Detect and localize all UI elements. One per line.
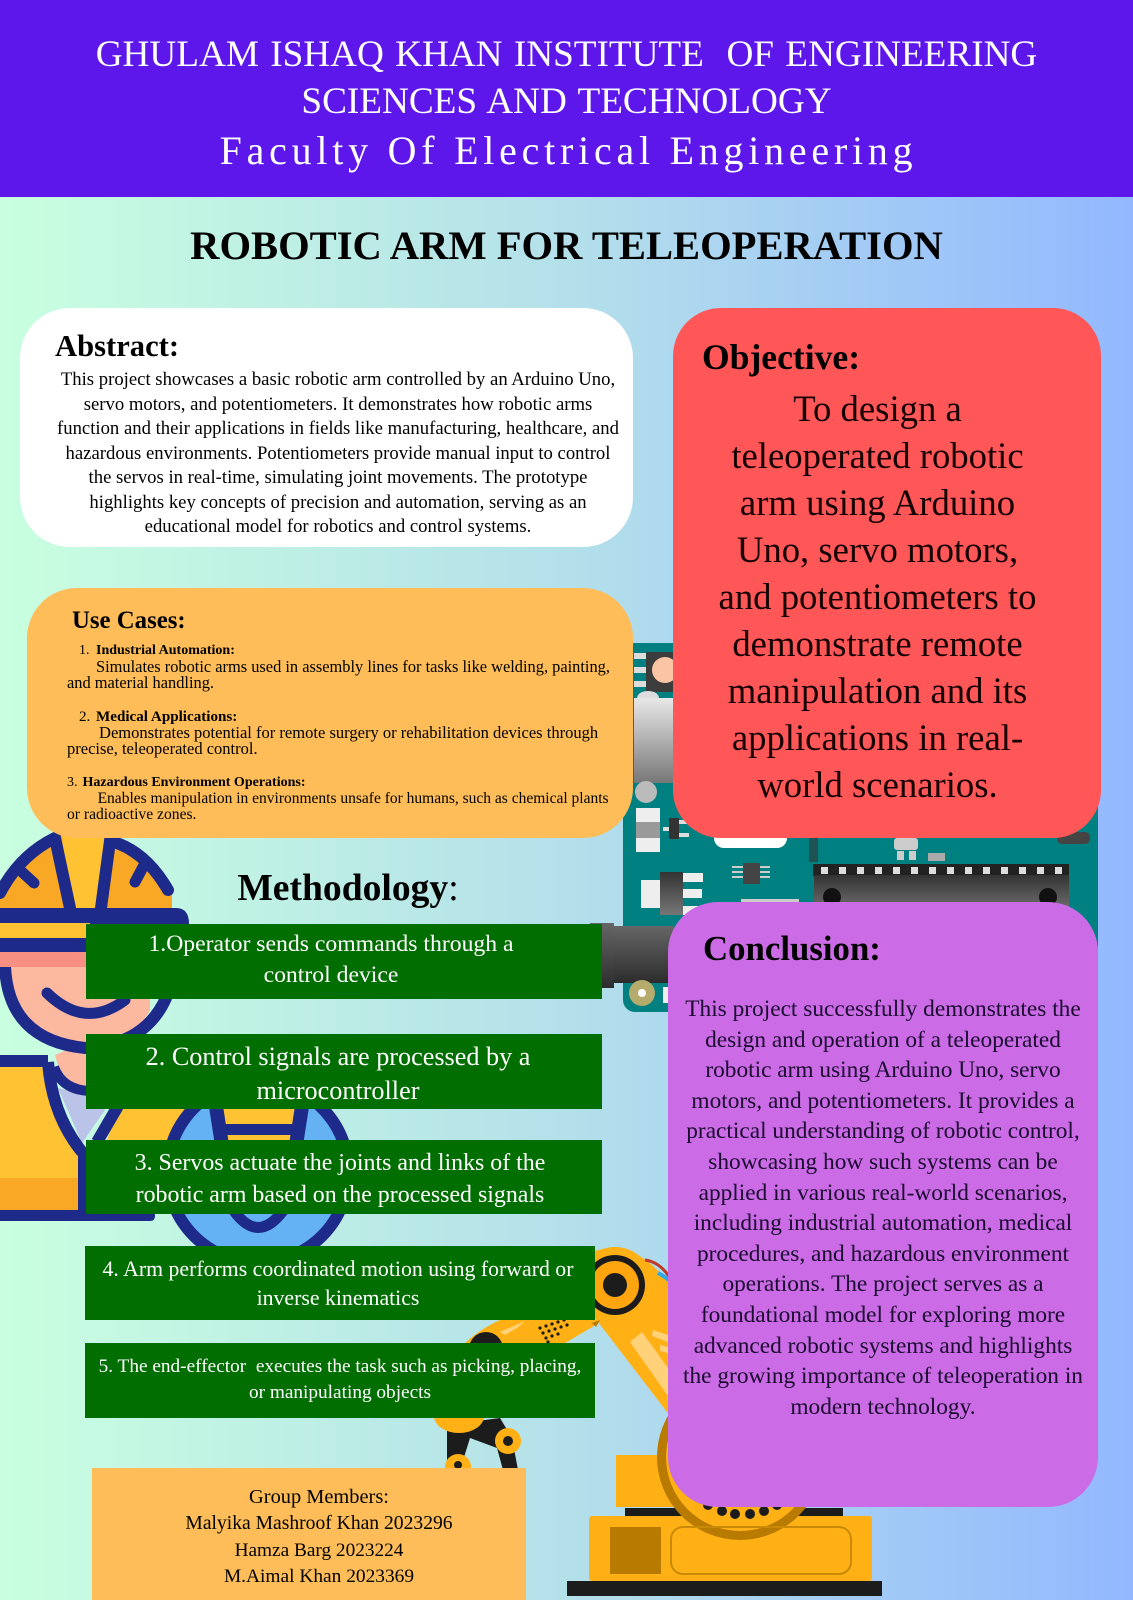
abstract text: servo motors, and potentiometers. It demonstrates how robotic arms [84, 394, 592, 414]
conclusion text: motors, and potentiometers. It provides a [691, 1088, 1075, 1114]
step 1 [86, 924, 602, 999]
use cases list: Medical Applications: [96, 709, 237, 725]
conclusion text: design and operation of a teleoperated [705, 1027, 1061, 1053]
use cases list: 1. [79, 643, 90, 658]
use cases list: and material handling. [67, 673, 214, 692]
conclusion heading: Conclusion: [703, 929, 881, 968]
abstract text: educational model for robotics and control systems. [145, 516, 531, 537]
institute name: GHULAM ISHAQ KHAN INSTITUTE OF ENGINEERING SCIENCES AND TECHNOLOGY [96, 34, 1037, 122]
use cases list: Enables manipulation in environments unsafe for humans, such as chemical plants [98, 790, 609, 806]
abstract text: highlights key concepts of precision and automation, serving as an [89, 492, 587, 512]
abstract heading: Abstract: [55, 329, 179, 363]
conclusion text: practical understanding of robotic control, [686, 1118, 1080, 1144]
conclusion text: showcasing how such systems can be [708, 1149, 1058, 1175]
title: ROBOTIC ARM FOR TELEOPERATION [190, 223, 943, 268]
step 1: control device [264, 962, 398, 988]
objective text: applications in real- [732, 717, 1023, 758]
panel: use cases [27, 588, 633, 838]
use cases list [67, 643, 610, 823]
conclusion text [683, 996, 1083, 1420]
conclusion text: advanced robotic systems and highlights [694, 1333, 1072, 1359]
objective text: arm using Arduino [740, 482, 1015, 523]
use cases list: or radioactive zones. [67, 806, 196, 823]
step 3: 3. Servos actuate the joints and links of the [135, 1150, 545, 1176]
conclusion text: This project successfully demonstrates the [685, 996, 1081, 1022]
use cases list: 2. [79, 709, 90, 725]
step 2: microcontroller [257, 1076, 419, 1105]
step 5 [85, 1343, 595, 1418]
step 3: robotic arm based on the processed signals [136, 1182, 544, 1208]
step 4: inverse kinematics [257, 1286, 419, 1310]
use cases list: Industrial Automation: [96, 643, 235, 658]
conclusion text: operations. The project serves as a [722, 1271, 1044, 1297]
step 4 [85, 1246, 595, 1320]
conclusion text: the growing importance of teleoperation in [683, 1363, 1083, 1389]
objective heading: Objective: [702, 337, 860, 377]
conclusion text: robotic arm using Arduino Uno, servo [705, 1057, 1061, 1083]
step 4: 4. Arm performs coordinated motion using forward or [103, 1257, 573, 1281]
panel: group members [92, 1468, 526, 1600]
step 5: 5. The end-effector executes the task such as picking, placing, or manipulating objects [99, 1356, 581, 1403]
use cases heading: Use Cases: [72, 607, 186, 634]
use cases list: precise, teleoperated control. [67, 739, 258, 758]
objective text: world scenarios. [757, 764, 998, 805]
use cases list: Simulates robotic arms used in assembly lines for tasks like welding, painting, [96, 656, 610, 676]
use cases list: 3. [67, 775, 78, 790]
panel: objective [673, 308, 1101, 838]
illustration: worker with hard hat [0, 832, 349, 1246]
objective text: To design a [793, 388, 962, 429]
step 1: 1.Operator sends commands through a [148, 930, 514, 956]
panel: group members: M.Aimal Khan 2023369 [224, 1566, 414, 1587]
methodology heading: Methodology: [237, 868, 459, 909]
use cases list: Demonstrates potential for remote surgery or rehabilitation devices through [99, 722, 598, 742]
objective text: demonstrate remote [732, 623, 1023, 664]
panel: group members: Group Members: [249, 1486, 389, 1508]
step 2 [86, 1034, 602, 1109]
panel: conclusion [668, 902, 1098, 1507]
header banner [0, 0, 1133, 197]
objective text: teleoperated robotic [731, 435, 1024, 476]
abstract text: the servos in real-time, simulating joint movements. The prototype [89, 467, 587, 488]
abstract text: This project showcases a basic robotic arm controlled by an Arduino Uno, [61, 369, 615, 390]
objective text: manipulation and its [728, 670, 1027, 711]
abstract text: function and their applications in fields like manufacturing, healthcare, and [57, 418, 619, 439]
panel: group members: Malyika Mashroof Khan 2023296 [185, 1513, 453, 1534]
step 3 [86, 1140, 602, 1214]
panel: group members: Hamza Barg 2023224 [235, 1540, 403, 1561]
conclusion text: applied in various real-world scenarios, [699, 1180, 1067, 1206]
use cases list: Hazardous Environment Operations: [82, 775, 305, 790]
faculty name: Faculty Of Electrical Engineering [220, 128, 917, 173]
conclusion text: foundational model for exploring more [701, 1302, 1065, 1328]
objective text [719, 388, 1036, 805]
conclusion text: including industrial automation, medical [694, 1210, 1072, 1236]
panel: abstract [20, 308, 633, 547]
conclusion text: procedures, and hazardous environment [697, 1241, 1069, 1267]
abstract text [57, 369, 619, 537]
objective text: and potentiometers to [719, 576, 1036, 617]
abstract text: hazardous environments. Potentiometers provide manual input to control [66, 442, 610, 464]
objective text: Uno, servo motors, [737, 529, 1018, 570]
step 2: 2. Control signals are processed by a [146, 1042, 530, 1071]
conclusion text: modern technology. [790, 1394, 976, 1420]
